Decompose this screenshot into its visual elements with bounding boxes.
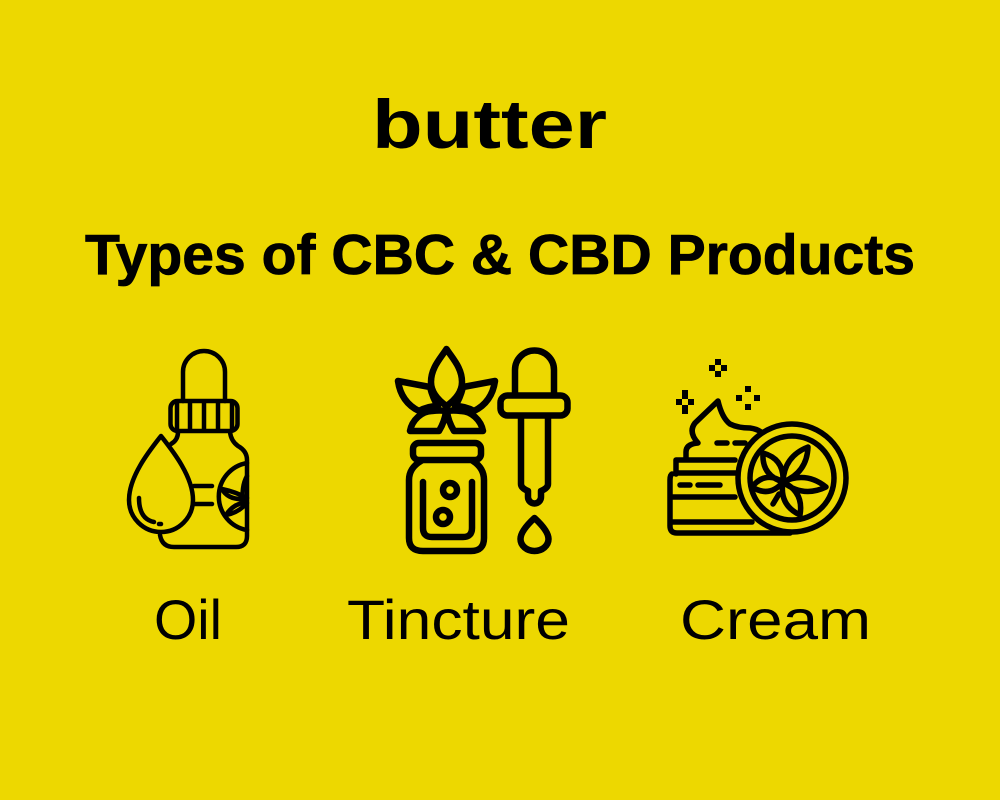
icon: cream jar with leaf badge	[670, 359, 846, 533]
label: Oil: Oil	[154, 588, 222, 651]
logo: butter: butter	[372, 86, 607, 163]
label: Tincture: Tincture	[347, 588, 570, 651]
title: Types of CBC & CBD Products	[85, 223, 915, 287]
icon: oil bottle with drop	[129, 351, 247, 547]
sparkles	[676, 359, 760, 414]
label: Cream: Cream	[680, 588, 871, 651]
icon: tincture jar, leaf and dropper	[398, 349, 568, 551]
